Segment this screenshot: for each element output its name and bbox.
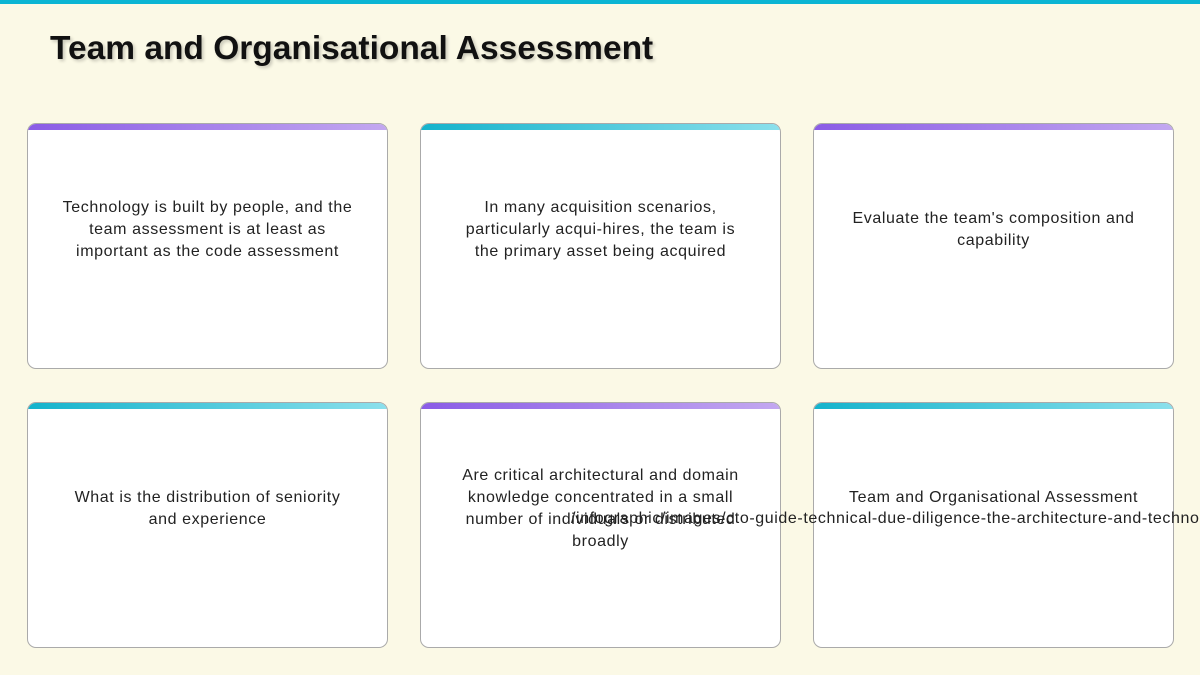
card 6: Team and Organisational Assessment — [849, 489, 1138, 506]
card 5: Are critical architectural and domain knowledge concentrated in a small number of individuals or distributed broadly — [462, 467, 739, 550]
card 1: Technology is built by people, and the team assessment is at least as important as the code assessment — [63, 199, 352, 260]
card 3 — [813, 123, 1174, 369]
card 5 — [420, 402, 781, 648]
card 4: What is the distribution of seniority and experience — [75, 489, 340, 528]
card 6 — [813, 402, 1174, 648]
card 2 — [420, 123, 781, 369]
card 3: Evaluate the team's composition and capability — [852, 210, 1134, 249]
card 1 — [27, 123, 388, 369]
card 2: In many acquisition scenarios, particularly acqui-hires, the team is the primary asset being acquired — [466, 199, 735, 260]
title: Team and Organisational Assessment — [50, 30, 653, 67]
card 4 — [27, 402, 388, 648]
